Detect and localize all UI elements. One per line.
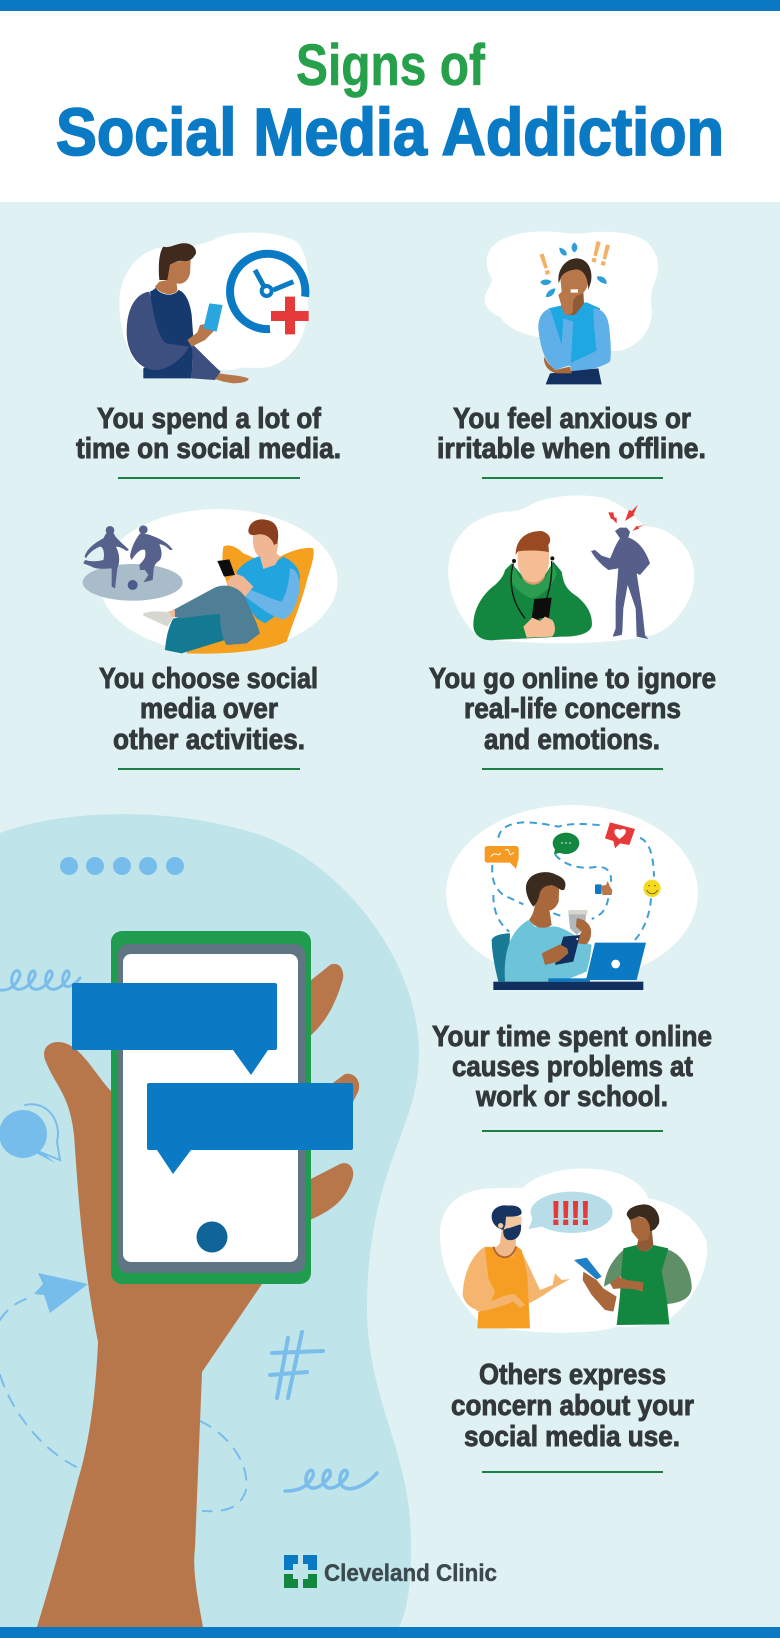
- desk: [493, 982, 643, 990]
- person: [492, 872, 592, 982]
- text: anxious offline: irritable when offline.: [437, 433, 706, 465]
- text: choosing social media: You choose social: [99, 663, 318, 695]
- hand and thumb: [37, 1042, 262, 1627]
- alarm marks: !: [535, 247, 555, 283]
- person in green: [574, 1204, 692, 1325]
- text: others express concern: [451, 1359, 694, 1453]
- paper plane: [34, 1273, 88, 1313]
- speech bubble: [528, 1192, 613, 1233]
- text: others express concern: concern about your: [451, 1390, 694, 1422]
- text: choosing social media: [99, 663, 318, 756]
- divider: [482, 1471, 663, 1473]
- decorative doodles: [0, 857, 377, 1511]
- anxious person: [538, 258, 611, 384]
- lounge chair: [187, 545, 314, 654]
- text: problems at work or school: [432, 1021, 712, 1113]
- panel: others express concern: [440, 1169, 707, 1333]
- white cloud: [440, 1169, 707, 1333]
- divider: [482, 477, 663, 479]
- large background blob: [0, 814, 419, 1627]
- white cloud: [99, 509, 338, 653]
- person in green hoodie: [473, 531, 592, 640]
- text: problems at work or school: work or school.: [475, 1081, 668, 1113]
- white cloud: [119, 232, 309, 370]
- text: ignoring concerns: [429, 663, 716, 756]
- clock icon: [230, 254, 309, 334]
- logo: Cleveland Clinic: Cleveland Clinic: [324, 1560, 497, 1587]
- phone frame: [111, 931, 311, 1284]
- text: anxious offline: [437, 403, 706, 465]
- divider: [482, 768, 663, 770]
- text: ignoring concerns: You go online to ignore: [429, 663, 716, 695]
- social icons: [485, 822, 661, 897]
- panel: ignoring concerns: [448, 496, 694, 643]
- logo mark: [284, 1555, 317, 1588]
- illustration: person at desk with social icons: [485, 822, 661, 990]
- white cloud: [448, 496, 694, 643]
- text: time on social media: You spend a lot of: [97, 403, 321, 435]
- panel: time on social media: [119, 232, 309, 383]
- white cloud: [446, 805, 698, 981]
- text: anxious offline: You feel anxious or: [453, 403, 691, 435]
- dashed flight path: [0, 1296, 35, 1320]
- text: others express concern: Others express: [479, 1359, 666, 1391]
- divider: [118, 477, 300, 479]
- hand holding phone: [37, 931, 359, 1627]
- laptop: [548, 943, 646, 982]
- football players: [83, 525, 183, 601]
- fingers: [305, 964, 359, 1222]
- header band: Signs of: [296, 33, 486, 98]
- dashed network lines: [492, 822, 654, 942]
- man in orange: [463, 1205, 570, 1328]
- divider: [118, 768, 300, 770]
- hashtag: [270, 1332, 323, 1398]
- divider: [482, 1130, 663, 1132]
- header band: Social Media Addiction: [56, 95, 724, 170]
- alarm marks: !: [596, 238, 614, 273]
- alarm marks: [535, 235, 614, 297]
- panel: anxious offline: [485, 231, 658, 384]
- squiggle bottom: [285, 1470, 377, 1491]
- angry silhouette: [591, 505, 650, 639]
- white cloud: [485, 231, 658, 351]
- panel: problems at work or school: [446, 805, 698, 990]
- text: time on social media: [76, 403, 341, 465]
- text: problems at work or school: causes problems at: [452, 1051, 693, 1083]
- text: others express concern: social media use.: [464, 1421, 680, 1453]
- home button: [196, 1222, 228, 1252]
- text: choosing social media: other activities.: [113, 724, 305, 756]
- squiggle top: [0, 971, 80, 990]
- text: problems at work or school: Your time spent online: [432, 1021, 712, 1053]
- text: time on social media: time on social media.: [76, 433, 341, 465]
- text: choosing social media: media over: [140, 693, 278, 725]
- text: ignoring concerns: and emotions.: [484, 724, 660, 756]
- man on phone, relaxed: [143, 519, 300, 653]
- chat bubbles icon: [0, 1104, 60, 1163]
- alarm marks: !: [587, 235, 605, 270]
- text: ignoring concerns: real-life concerns: [464, 693, 681, 725]
- message bubble bottom: [147, 1083, 353, 1174]
- panel: choosing social media: [83, 509, 338, 654]
- message bubble top: [72, 983, 277, 1075]
- bottom band: [0, 1627, 780, 1638]
- speech bubble: !!!!: [551, 1195, 590, 1232]
- header band: [0, 0, 780, 202]
- logo: Cleveland Clinic: [284, 1555, 497, 1588]
- man on phone: [127, 243, 249, 383]
- typing dots: [60, 857, 184, 875]
